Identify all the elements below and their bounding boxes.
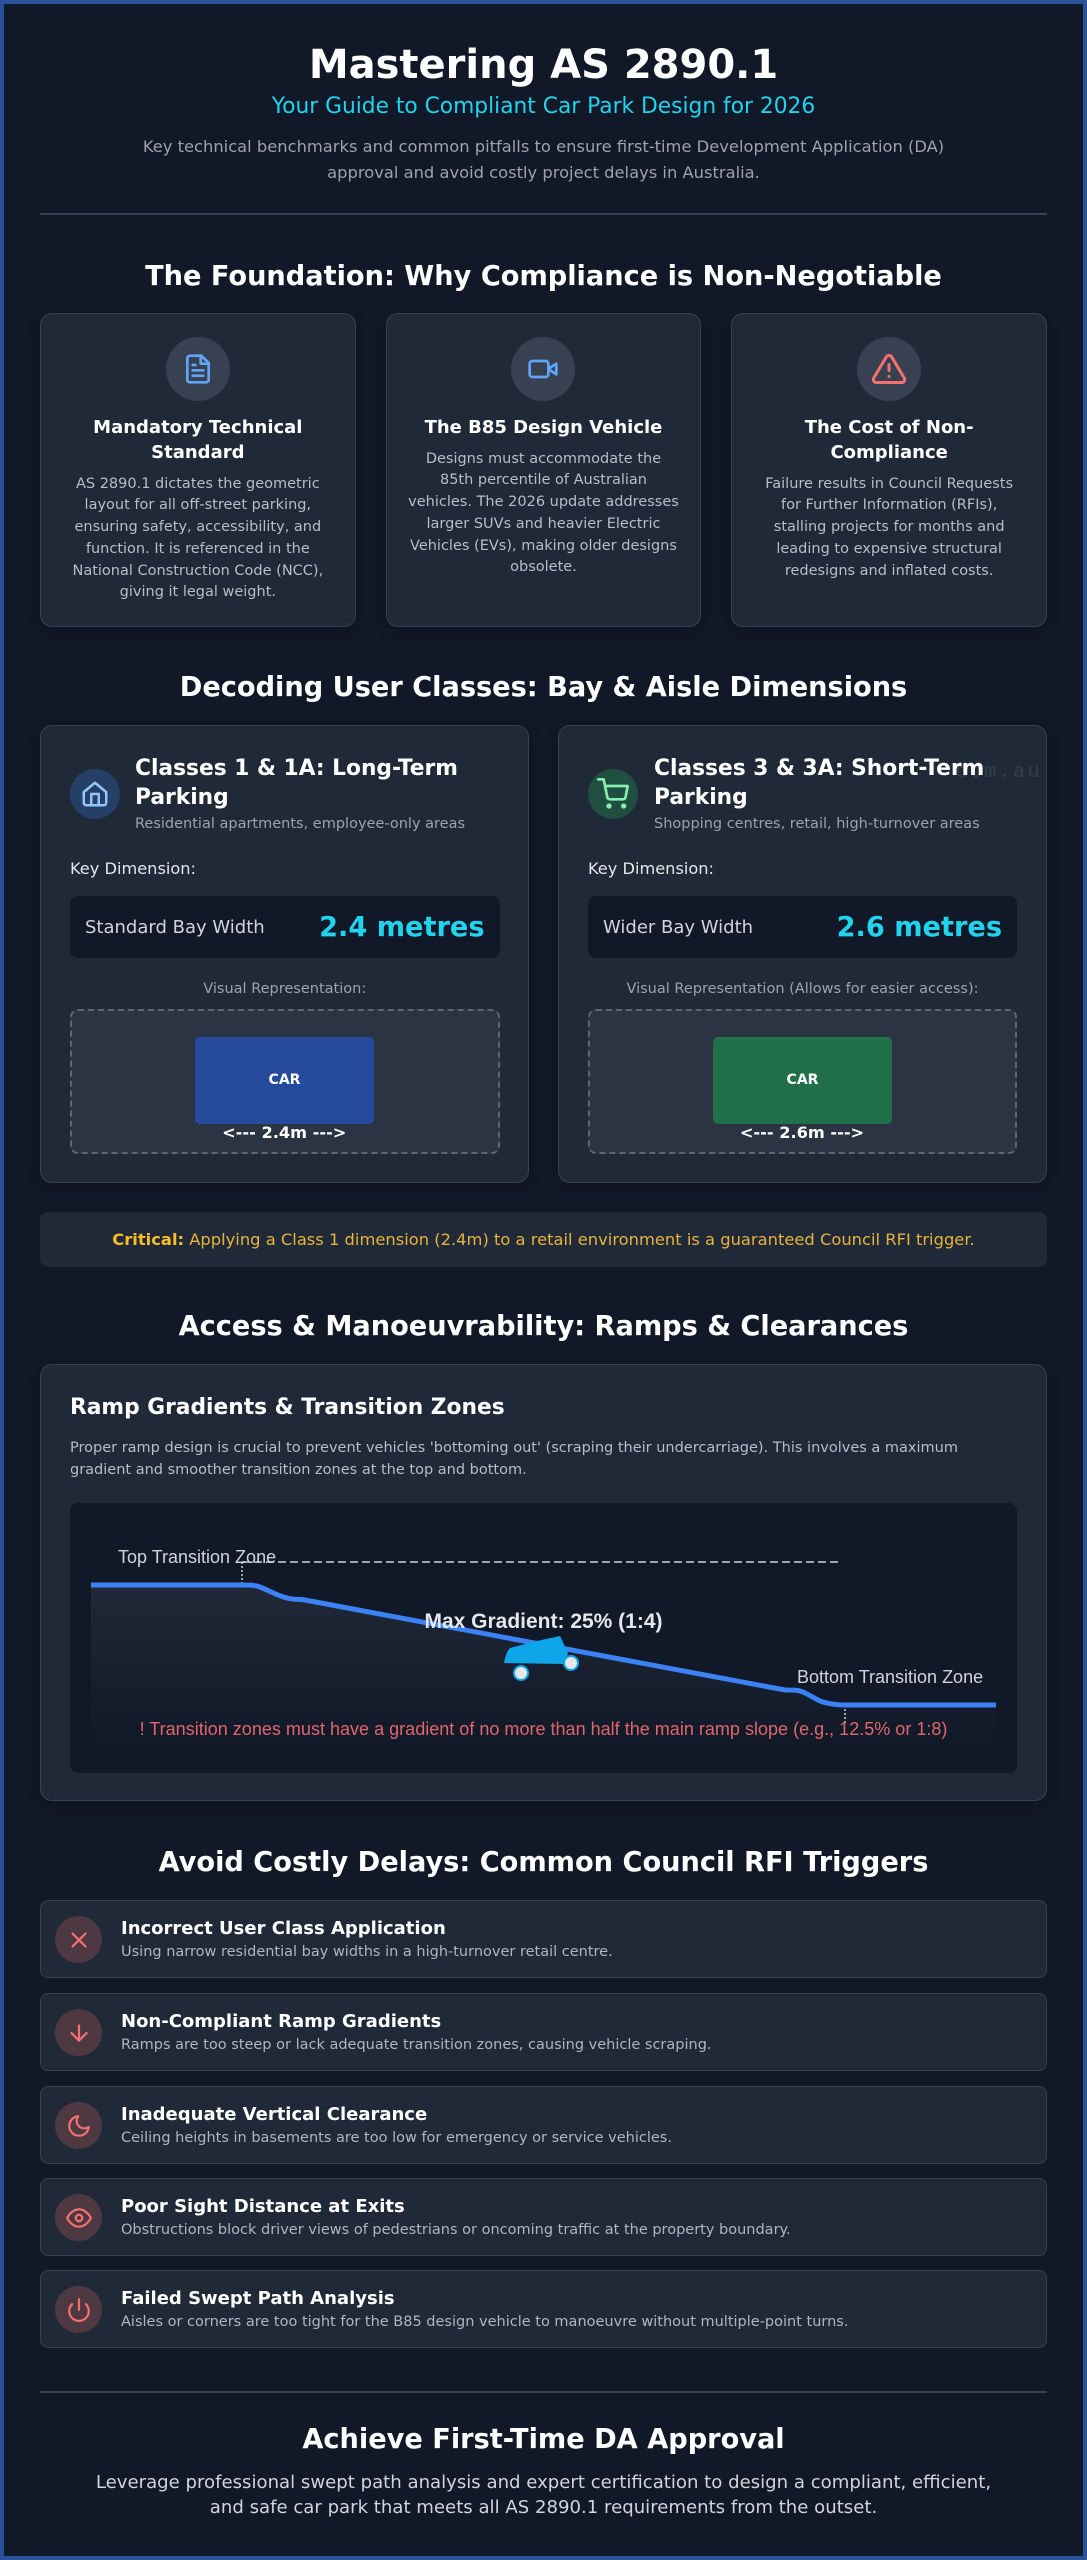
icon: document (166, 337, 230, 401)
card text: for Further Information (RFIs), (781, 497, 997, 513)
top zone guide (242, 1562, 840, 1585)
card title: The B85 Design Vehicle (425, 417, 662, 438)
card title (93, 417, 302, 463)
panel: classes 1 and 1A (40, 725, 528, 1183)
card title (804, 417, 974, 463)
heading: RFI triggers: Avoid Costly Delays: Common Council RFI Triggers (159, 1847, 928, 1878)
row text: Aisles or corners are too tight for the B85 design vehicle to manoeuvre without multiple-point turns. (121, 2314, 848, 2330)
heading: foundation: The Foundation: Why Compliance is Non-Negotiable (145, 260, 942, 292)
bay diagram (70, 1009, 500, 1154)
card text: obsolete. (510, 559, 577, 575)
subtitle: Your Guide to Compliant Car Park Design for 2026 (272, 94, 815, 118)
panel: classes 3 and 3A (558, 725, 1047, 1183)
icon: cross (55, 1916, 102, 1963)
card title: Mandatory Technical (93, 417, 302, 438)
footer text (96, 2472, 991, 2518)
title: Mastering AS 2890.1 (309, 42, 778, 88)
row title: Poor Sight Distance at Exits (121, 2196, 405, 2217)
panel: cost of non-compliance (731, 313, 1047, 627)
car on ramp (504, 1636, 578, 1680)
card text: layout for all off-street parking, (85, 497, 311, 513)
dimension value: 2.4 metres (319, 912, 484, 943)
row title: Failed Swept Path Analysis (121, 2288, 395, 2309)
width label: <--- 2.4m ---> (222, 1123, 346, 1142)
callout: critical warning (40, 1212, 1047, 1267)
card text: larger SUVs and heavier Electric (427, 516, 660, 532)
footer text: Leverage professional swept path analysis and expert certification to design a compliant, efficient, (96, 2472, 991, 2493)
icon: eye (55, 2194, 102, 2241)
icon: video (511, 337, 575, 401)
card text: leading to expensive structural (776, 541, 1002, 557)
chart: ramp diagram (70, 1503, 1017, 1773)
card text: Designs must accommodate the (426, 450, 661, 466)
car block (713, 1037, 892, 1124)
panel text: Proper ramp design is crucial to prevent vehicles 'bottoming out' (scraping their undercarriage). This involves a maximum (70, 1440, 958, 1456)
ramp fill (91, 1585, 996, 1750)
intro text: approval and avoid costly project delays in Australia. (327, 163, 760, 182)
card text: Failure results in Council Requests (765, 476, 1013, 492)
card text: function. It is referenced in the (86, 541, 310, 557)
card text (765, 476, 1013, 579)
panel: ramp gradients (40, 1364, 1047, 1801)
card text (408, 450, 679, 575)
card text: giving it legal weight. (120, 584, 276, 600)
card text: 85th percentile of Australian (440, 472, 647, 488)
header (143, 42, 944, 182)
row text: Using narrow residential bay widths in a high-turnover retail centre. (121, 1944, 613, 1960)
intro text: Key technical benchmarks and common pitfalls to ensure first-time Development Application (DA) (143, 137, 944, 156)
row: sight distance (40, 2178, 1047, 2256)
row: incorrect user class (40, 1900, 1047, 1978)
callout: critical warning: Critical: Applying a Class 1 dimension (2.4m) to a retail environment is a guaranteed Council RFI trigger. (112, 1230, 975, 1249)
car block: CAR (269, 1072, 300, 1088)
heading: user classes: Decoding User Classes: Bay & Aisle Dimensions (180, 672, 907, 702)
watermark: com.au (956, 761, 1042, 784)
icon: down arrow (55, 2009, 102, 2056)
dimension label: Wider Bay Width (603, 916, 753, 938)
row title: Non-Compliant Ramp Gradients (121, 2011, 441, 2032)
icon: warning triangle (857, 337, 921, 401)
panel text (70, 1440, 958, 1478)
card text: AS 2890.1 dictates the geometric (76, 476, 320, 492)
dimension box (588, 896, 1017, 958)
visual label: Visual Representation: (203, 981, 366, 997)
card text: ensuring safety, accessibility, and (74, 519, 321, 535)
key dimension label: Key Dimension: (588, 858, 714, 878)
card text (72, 476, 323, 600)
panel title: Ramp Gradients & Transition Zones (70, 1395, 505, 1420)
card text: redesigns and inflated costs. (785, 563, 993, 579)
panel: B85 design vehicle (386, 313, 701, 627)
class title (654, 756, 984, 810)
row text: Ceiling heights in basements are too low for emergency or service vehicles. (121, 2130, 672, 2146)
class title: Parking (654, 785, 748, 810)
panel text: gradient and smoother transition zones at the top and bottom. (70, 1462, 527, 1478)
class title: Classes 1 & 1A: Long-Term (135, 756, 458, 781)
label: max gradient: Max Gradient: 25% (1:4) (424, 1610, 663, 1633)
width label: <--- 2.6m ---> (740, 1123, 864, 1142)
class use: Residential apartments, employee-only areas (135, 816, 465, 832)
key dimension label: Key Dimension: (70, 858, 196, 878)
class title (135, 756, 458, 810)
footer text: and safe car park that meets all AS 2890.1 requirements from the outset. (210, 2497, 877, 2518)
car block: CAR (787, 1072, 818, 1088)
heading: access: Access & Manoeuvrability: Ramps & Clearances (179, 1311, 908, 1342)
note: ! Transition zones must have a gradient of no more than half the main ramp slope (e.g., 12.5% or 1:8) (140, 1719, 947, 1739)
icon: power (55, 2286, 102, 2333)
footer (96, 2424, 991, 2518)
card title: Compliance (830, 442, 948, 463)
class title: Classes 3 & 3A: Short-Term (654, 756, 984, 781)
icon: moon (55, 2102, 102, 2149)
bottom zone guide (844, 1705, 846, 1723)
label: bottom zone: Bottom Transition Zone (797, 1667, 983, 1687)
card text: National Construction Code (NCC), (72, 563, 323, 579)
footer heading: Achieve First-Time DA Approval (302, 2424, 785, 2454)
card text: stalling projects for months and (774, 519, 1005, 535)
car block (195, 1037, 374, 1124)
ramp profile (91, 1585, 996, 1705)
bay diagram (588, 1009, 1017, 1154)
class use: Shopping centres, retail, high-turnover areas (654, 816, 980, 832)
row text: Obstructions block driver views of pedestrians or oncoming traffic at the property boundary. (121, 2222, 791, 2238)
row title: Inadequate Vertical Clearance (121, 2104, 427, 2125)
dimension box (70, 896, 500, 958)
icon: cart (588, 769, 638, 819)
row: swept path (40, 2270, 1047, 2348)
card text: vehicles. The 2026 update addresses (408, 494, 679, 510)
visual label: Visual Representation (Allows for easier access): (626, 981, 978, 997)
card title: The Cost of Non- (805, 417, 974, 438)
panel: mandatory technical standard (40, 313, 356, 627)
row title: Incorrect User Class Application (121, 1918, 446, 1939)
row: ramp gradients (40, 1993, 1047, 2071)
row: vertical clearance (40, 2086, 1047, 2164)
intro text (143, 137, 944, 182)
icon: house (70, 769, 120, 819)
row text: Ramps are too steep or lack adequate transition zones, causing vehicle scraping. (121, 2037, 712, 2053)
dimension label: Standard Bay Width (85, 916, 265, 938)
card title: Standard (151, 442, 244, 463)
label: top zone: Top Transition Zone (118, 1547, 276, 1567)
card text: Vehicles (EVs), making older designs (410, 538, 677, 554)
dimension value: 2.6 metres (837, 912, 1002, 943)
class title: Parking (135, 785, 229, 810)
